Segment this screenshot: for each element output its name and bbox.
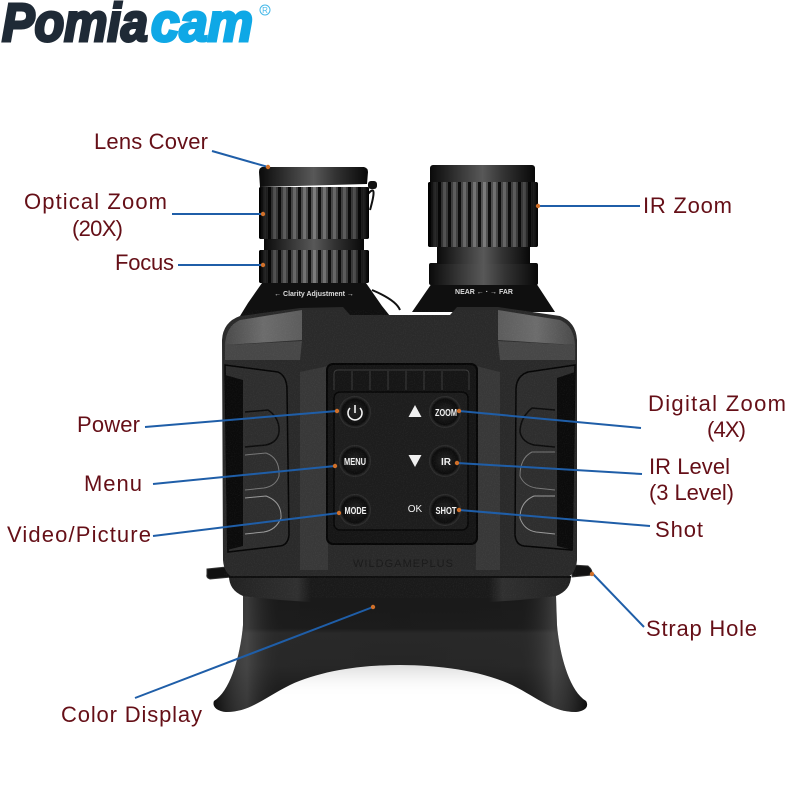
cover clip <box>368 181 377 189</box>
zoom button: ZOOM <box>435 408 457 419</box>
mode button: MODE <box>344 506 367 517</box>
left lens assembly <box>240 167 390 316</box>
label: Lens Cover: Lens Cover <box>94 129 208 154</box>
label: Color Display: Color Display <box>61 702 202 727</box>
shot button: SHOT <box>436 506 456 517</box>
logo: Pomiacam <box>2 0 270 53</box>
button area <box>334 392 468 530</box>
label: IR Level: IR Level <box>649 454 730 479</box>
left grip <box>225 365 289 552</box>
lower body <box>229 576 571 604</box>
body separator line <box>229 576 571 578</box>
main body <box>222 307 577 578</box>
up arrow <box>408 405 422 417</box>
right lower shoulder <box>498 341 575 360</box>
label: 4X: (4X) <box>707 417 746 442</box>
zoom button <box>429 396 461 428</box>
left shoulder highlight <box>225 310 302 345</box>
clarity adjustment text: ← Clarity Adjustment → <box>274 291 354 298</box>
left focus ring <box>259 250 369 283</box>
right top barrel <box>430 165 535 185</box>
label: Power: Power <box>77 412 140 437</box>
logo: Pomiacam: R <box>262 6 268 15</box>
brand emboss: WILDGAMEPLUS <box>353 558 453 570</box>
near far text: NEAR ← · → FAR <box>455 289 513 296</box>
IR zoom ring <box>428 182 538 247</box>
left lower shoulder <box>225 341 302 360</box>
strap cord <box>368 190 400 310</box>
IR button: IR <box>441 457 452 468</box>
right cone <box>412 283 555 312</box>
right grip <box>515 365 575 550</box>
OK label: OK <box>408 504 423 515</box>
menu button <box>339 445 371 477</box>
label: Menu: Menu <box>84 471 142 496</box>
down arrow <box>408 455 422 467</box>
callout lines <box>135 151 650 698</box>
label: Video/Picture: Video/Picture <box>7 522 151 547</box>
label: IR Zoom: IR Zoom <box>643 193 732 218</box>
strap lug right <box>572 565 592 577</box>
power button <box>339 396 371 428</box>
label: Shot: Shot <box>655 517 703 542</box>
strap lug left <box>207 567 232 579</box>
label: Focus: Focus <box>115 250 174 275</box>
menu button: MENU <box>344 457 366 468</box>
left neck <box>264 238 364 250</box>
right side strip <box>476 366 500 570</box>
eyecup shadow <box>240 665 560 712</box>
IR button <box>429 445 461 477</box>
left optical zoom ring <box>259 187 369 239</box>
left cone <box>240 283 390 316</box>
right neck <box>437 247 530 264</box>
vent slots <box>334 370 469 390</box>
shot button <box>429 494 461 526</box>
lens cover <box>259 167 368 187</box>
label: 3 Level: (3 Level) <box>649 480 734 505</box>
night vision binocular device <box>207 165 592 712</box>
label: 20X: (20X) <box>72 216 123 241</box>
right collar <box>429 263 538 285</box>
left side strip <box>300 366 328 570</box>
right shoulder highlight <box>498 310 575 345</box>
mode button <box>339 494 371 526</box>
label: Digital Zoom: Digital Zoom <box>648 391 786 416</box>
control panel <box>327 364 477 544</box>
label: Strap Hole: Strap Hole <box>646 616 757 641</box>
color display eyecup <box>214 596 587 712</box>
right lens assembly <box>412 165 555 312</box>
callout dots <box>261 165 594 609</box>
surface grain <box>224 310 576 598</box>
label: Optical Zoom: Optical Zoom <box>24 189 167 214</box>
